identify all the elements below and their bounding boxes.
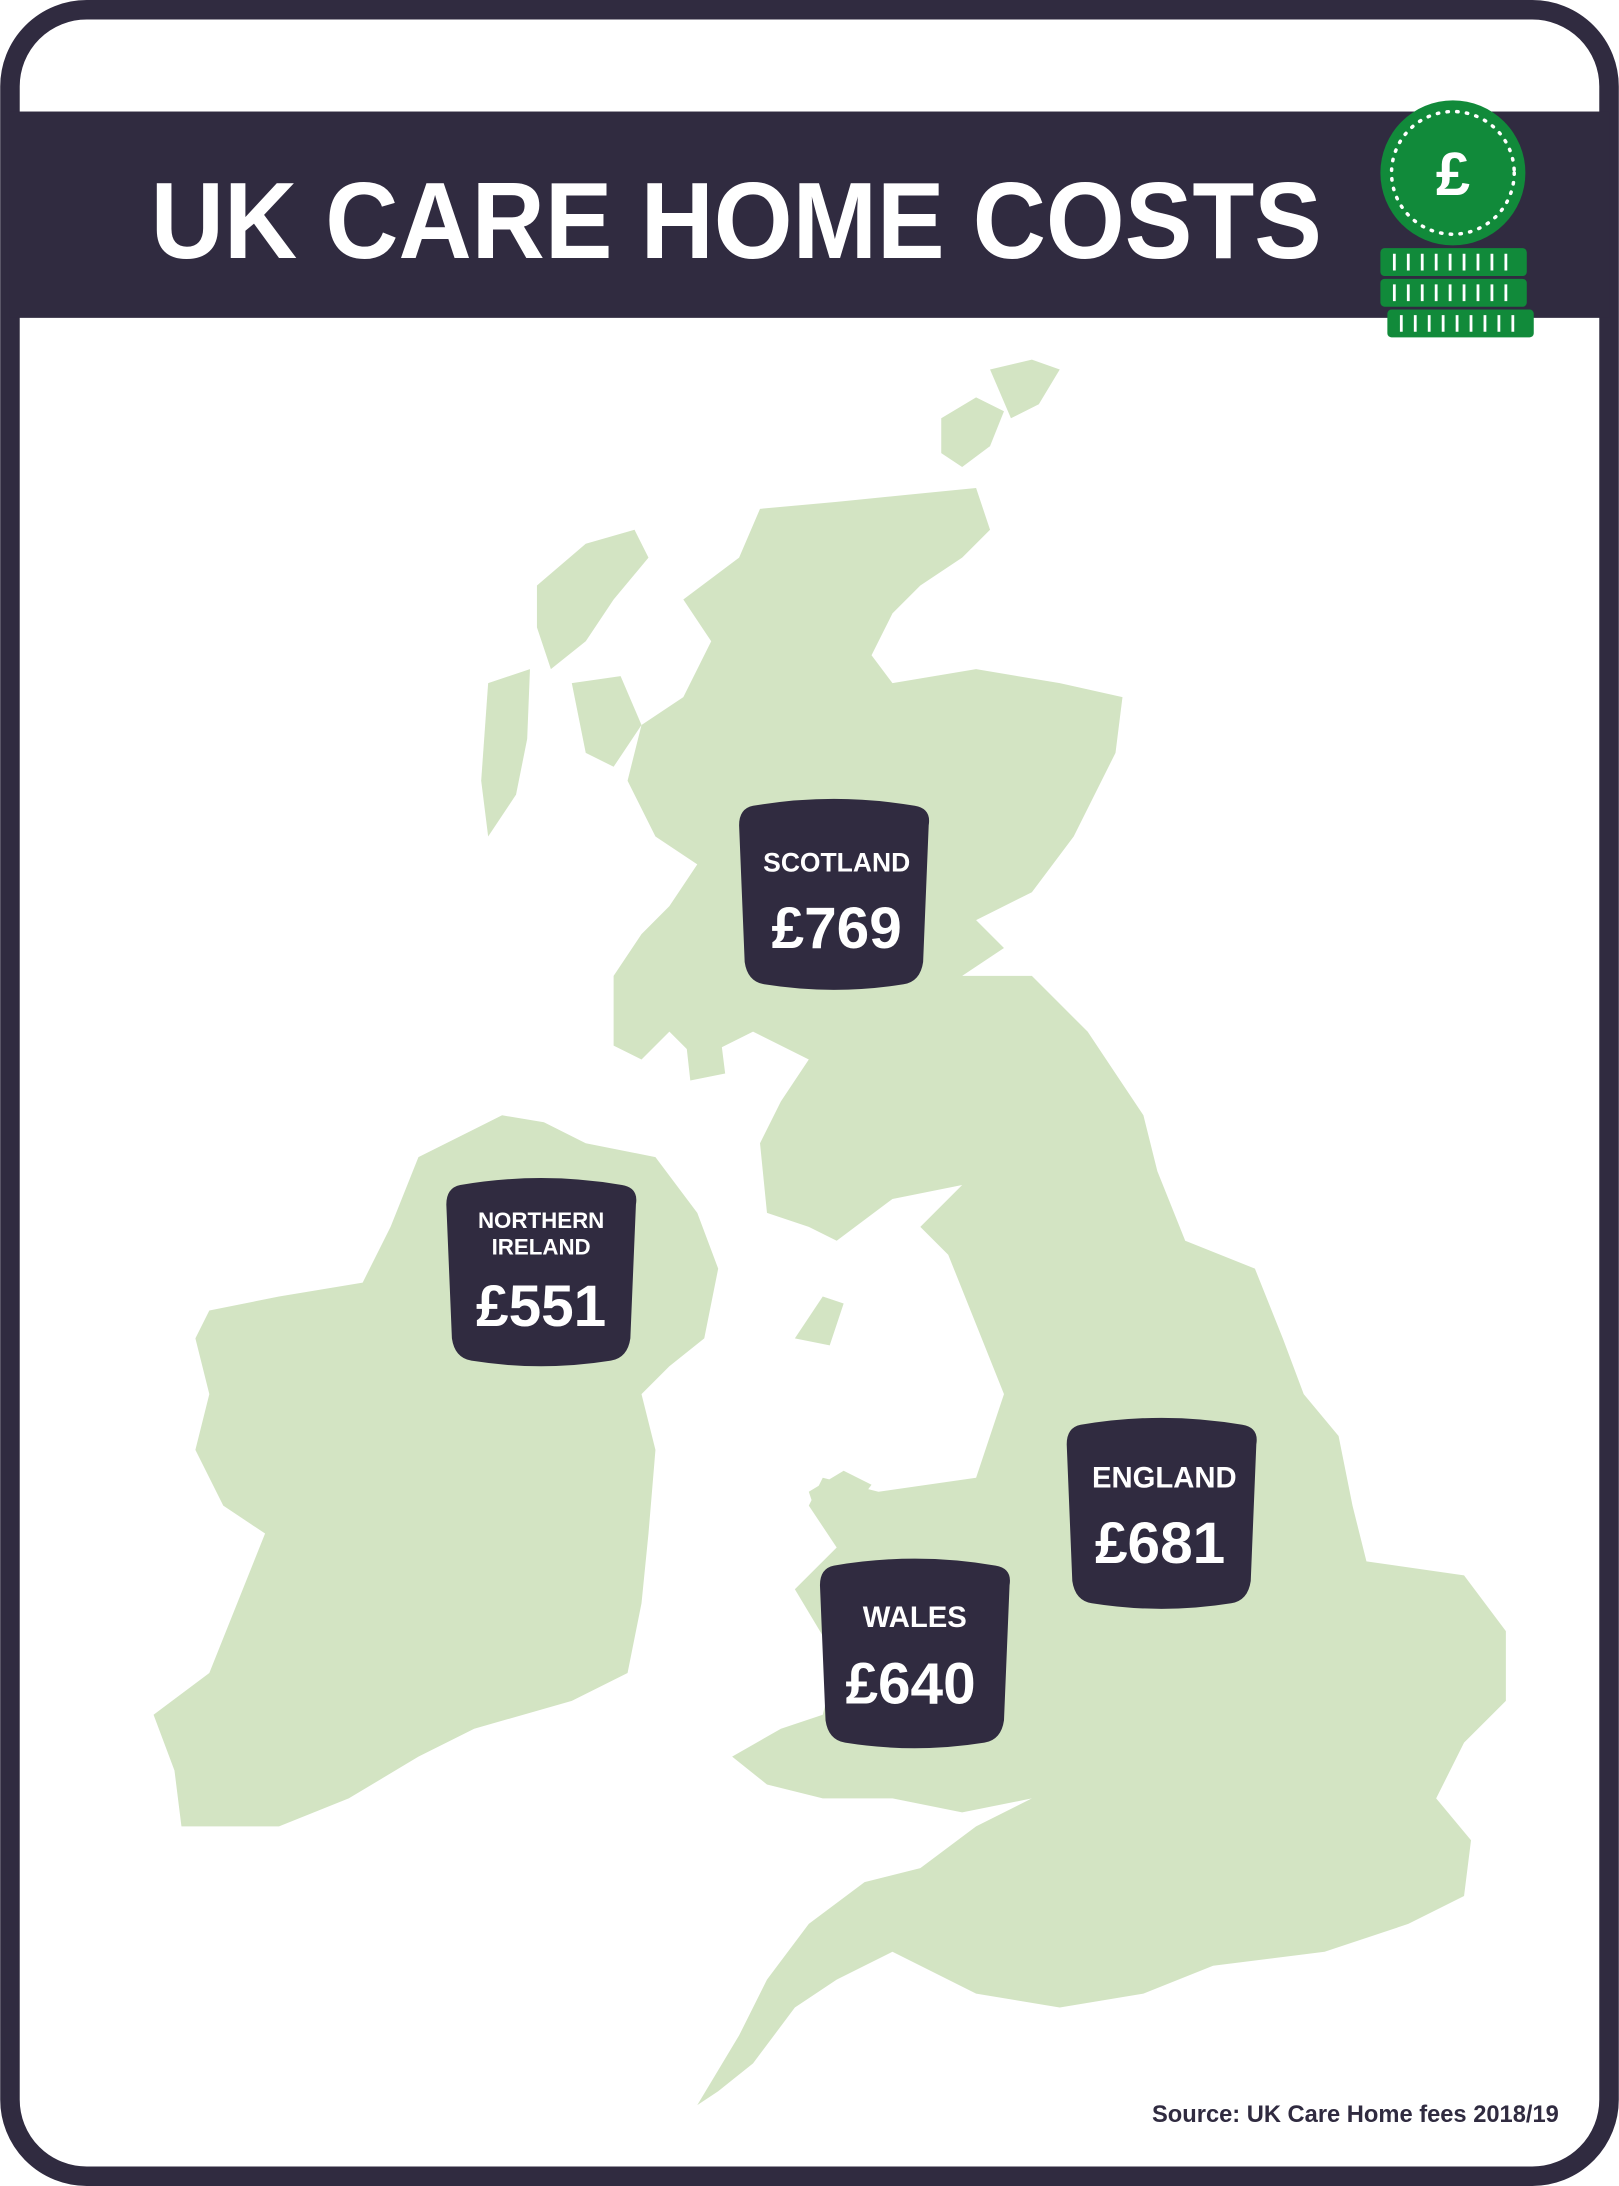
map: Ireland: [154, 1115, 718, 1826]
badge: Scotland: SCOTLAND: [763, 847, 910, 877]
header band: [10, 112, 1609, 318]
badge: Northern Ireland: NORTHERN: [478, 1208, 604, 1233]
badge: Northern Ireland: [446, 1178, 636, 1366]
badge: Scotland: [739, 799, 929, 990]
badge: England: ENGLAND: [1092, 1463, 1237, 1495]
badge: England: £681: [1095, 1511, 1225, 1576]
badge: Wales: [820, 1559, 1010, 1748]
source note: Source: UK Care Home fees 2018/19: [1152, 2102, 1559, 2128]
icon: pound coin stack: [1380, 100, 1534, 337]
badge: Scotland: £769: [772, 896, 902, 961]
badge: England: [1067, 1418, 1257, 1609]
badge: Northern Ireland: £551: [476, 1274, 606, 1339]
title: UK CARE HOME COSTS: [151, 161, 1322, 282]
icon: pound coin stack: £: [1436, 139, 1470, 208]
map: Great Britain: [481, 360, 1506, 2105]
badge: Northern Ireland: IRELAND: [492, 1235, 591, 1260]
badge: Wales: WALES: [863, 1602, 967, 1634]
badge: Wales: £640: [845, 1652, 976, 1717]
